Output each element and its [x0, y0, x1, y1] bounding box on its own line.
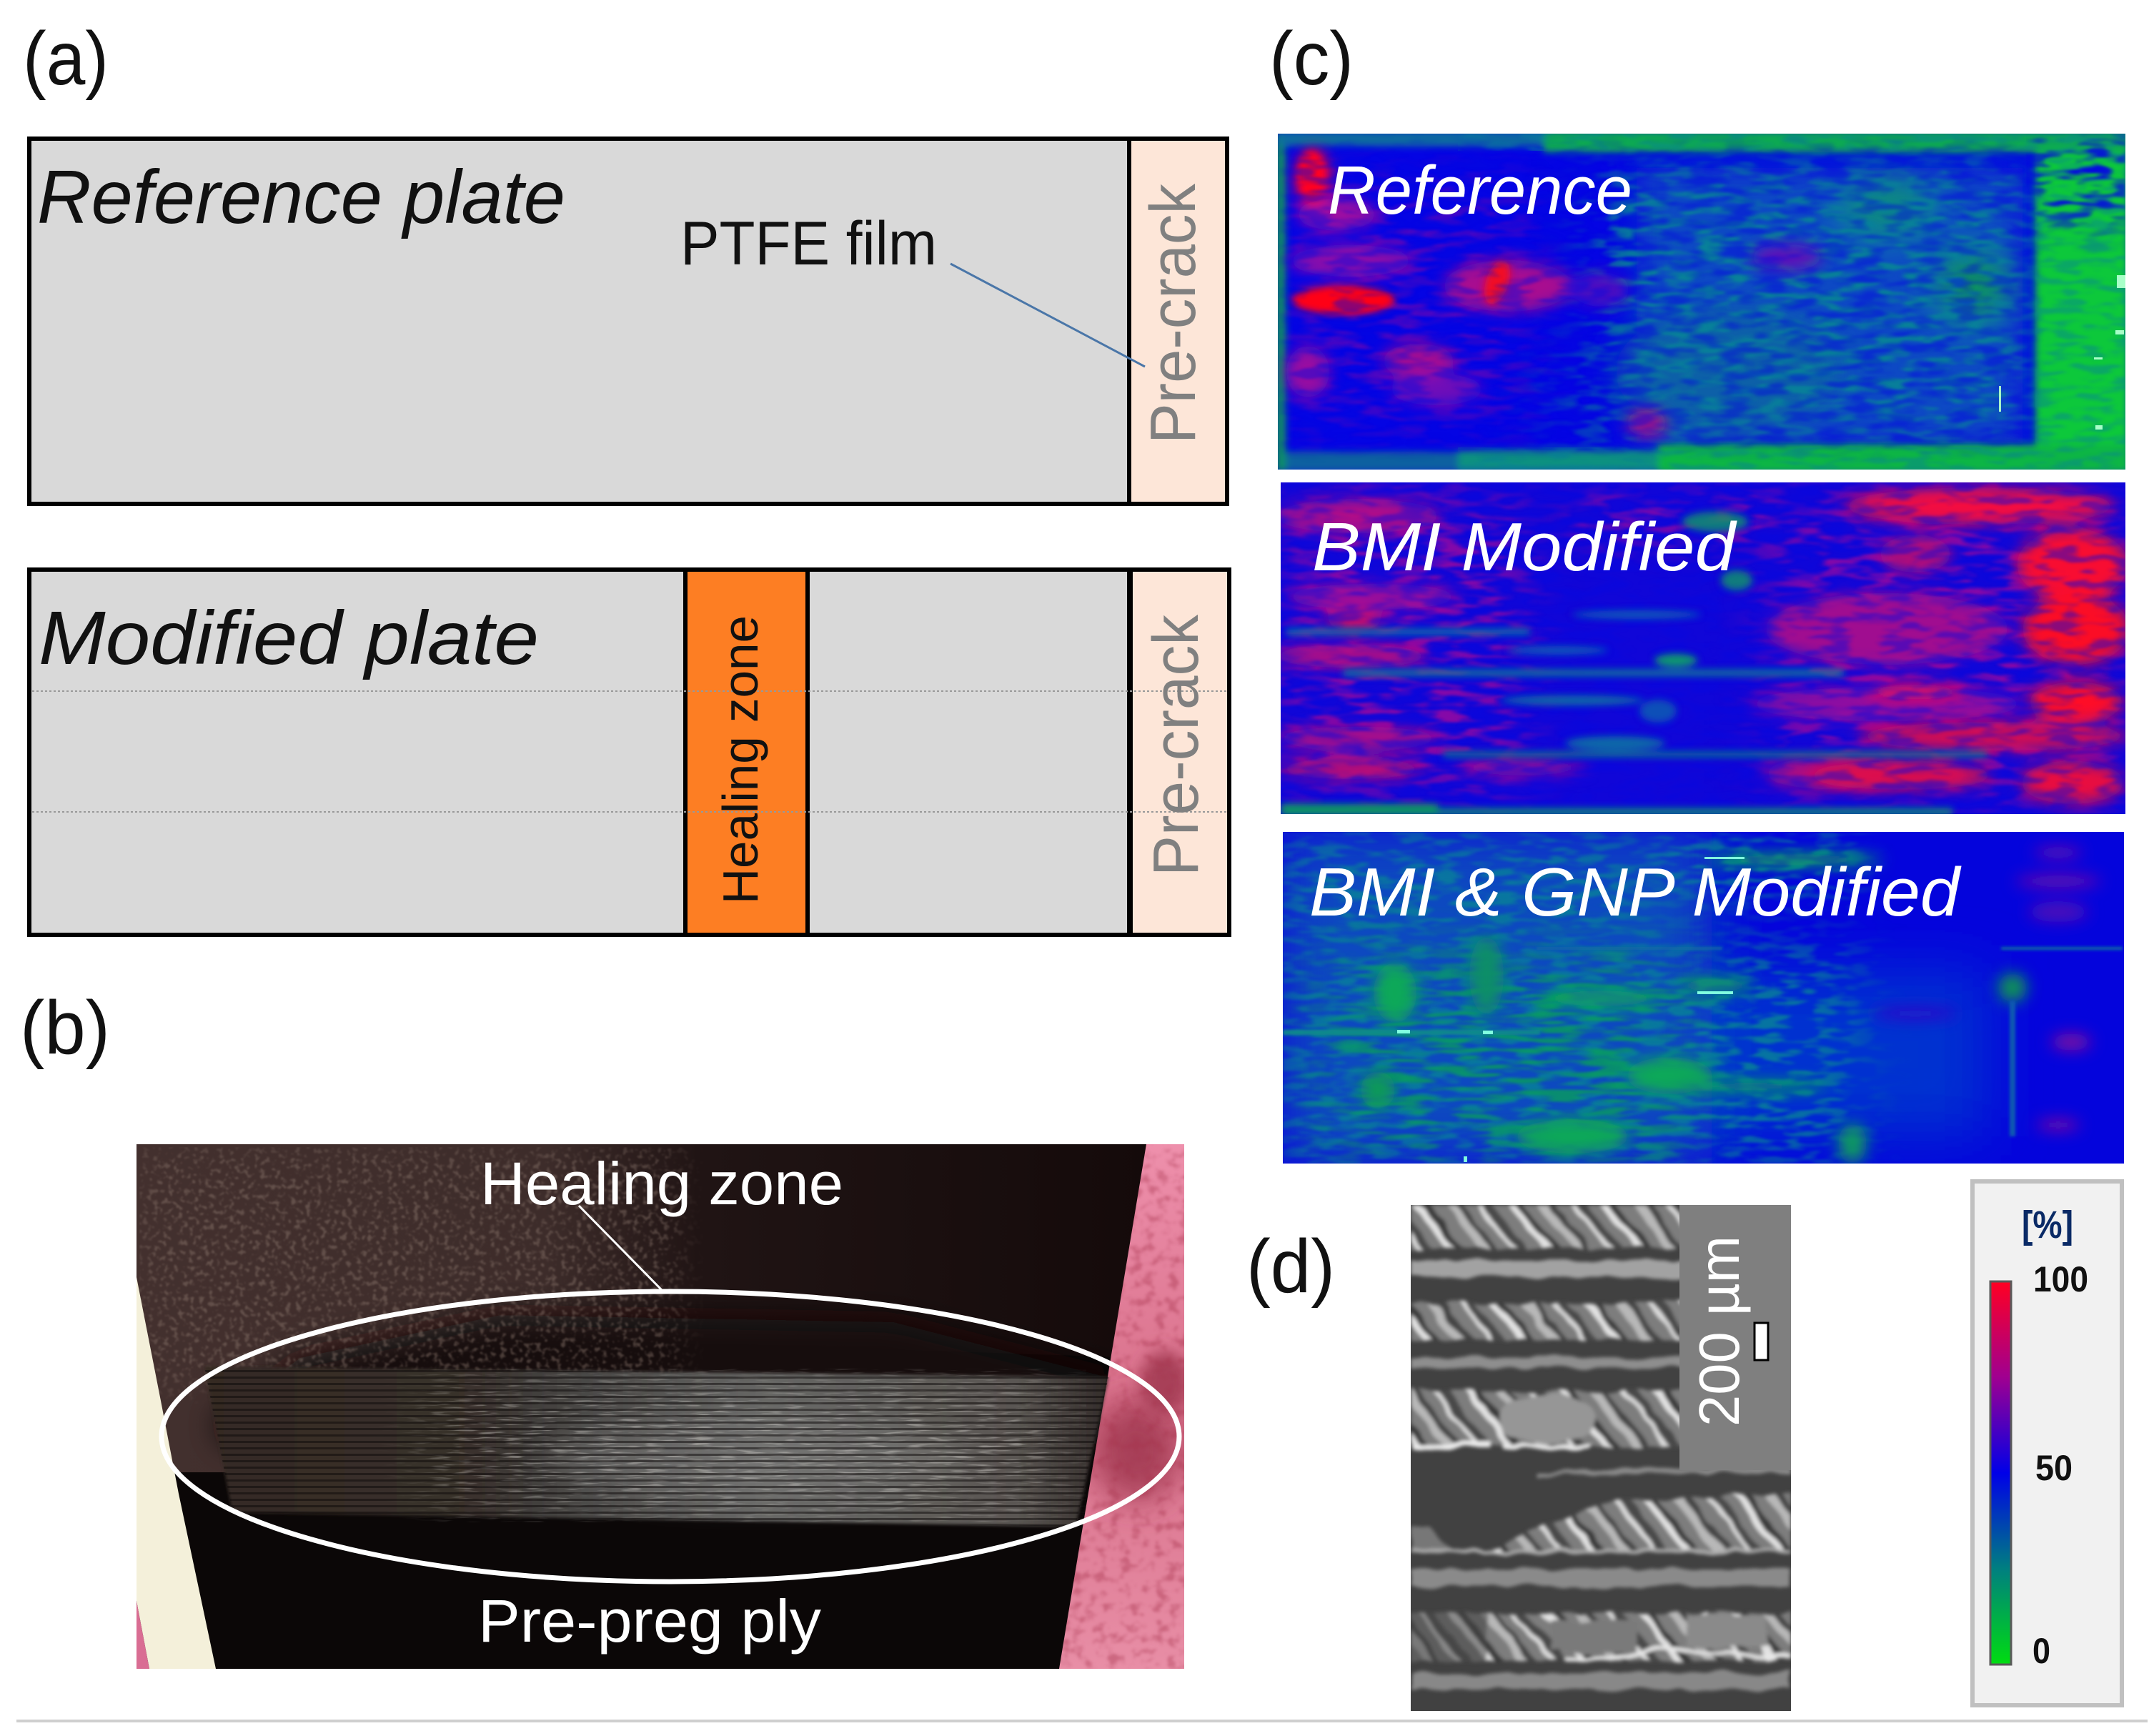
- panel label: (a): (a): [23, 16, 109, 101]
- plate title: Modified plate: [39, 596, 539, 680]
- unit: [%]: [2022, 1204, 2073, 1246]
- plate body: [29, 139, 1227, 504]
- healing zone label: Healing zone: [480, 1150, 843, 1217]
- ellipse marker: [162, 1291, 1179, 1582]
- healing zone stripes: [204, 1367, 1108, 1527]
- scale bar area: [1679, 1205, 1791, 1470]
- bright specks: [1999, 275, 2125, 430]
- scale bar: [1755, 1323, 1768, 1360]
- heat map: BMI and GNP modified: [1283, 832, 2124, 1164]
- pre-crack label: Pre-crack: [1141, 614, 1212, 876]
- pre-preg label: Pre-preg ply: [478, 1587, 821, 1655]
- PTFE film label: PTFE film: [680, 209, 937, 278]
- scale label: 200 µm: [1687, 1236, 1751, 1427]
- panel label: (c): (c): [1269, 16, 1354, 101]
- reference label: Reference: [1328, 152, 1632, 229]
- colour bar: [1990, 1281, 2011, 1665]
- pre-crack strip: [1130, 572, 1227, 933]
- micrograph: cross-section: [1401, 1201, 1801, 1711]
- legend: colour scale: 0: [2033, 1631, 2050, 1671]
- pink mat: [1058, 1144, 1190, 1669]
- healing zone strip: [685, 570, 808, 935]
- tick labels: 100: [2033, 1259, 2088, 1299]
- pre-crack strip: [1129, 141, 1225, 502]
- leader line: [579, 1206, 662, 1290]
- healing zone label: Healing zone: [713, 615, 768, 904]
- panel label: (b): (b): [20, 986, 110, 1070]
- plate body: [29, 570, 1229, 935]
- panel: reference plate schematic: [29, 139, 1227, 504]
- cream backing: [137, 1277, 216, 1669]
- legend box: [1972, 1181, 2122, 1705]
- bright specks: [1397, 857, 1744, 1162]
- legend: colour scale: 50: [2035, 1448, 2073, 1488]
- heat map: BMI modified: [1272, 482, 2130, 815]
- BMI and GNP modified label: BMI & GNP Modified: [1309, 854, 1962, 931]
- panel: photo of healing zone on pre-preg ply: [137, 1144, 1190, 1669]
- BMI modified label: BMI Modified: [1312, 509, 1737, 585]
- plate title: Reference plate: [37, 155, 565, 239]
- pre-crack label: Pre-crack: [1138, 183, 1209, 444]
- speckled upper surface: [137, 1144, 1158, 1472]
- panel: modified plate schematic: [29, 570, 1229, 935]
- leader line: [951, 264, 1145, 367]
- panel label: (d): (d): [1246, 1224, 1335, 1309]
- heat map: reference: [1276, 131, 2130, 473]
- legend: colour scale: [1972, 1181, 2122, 1705]
